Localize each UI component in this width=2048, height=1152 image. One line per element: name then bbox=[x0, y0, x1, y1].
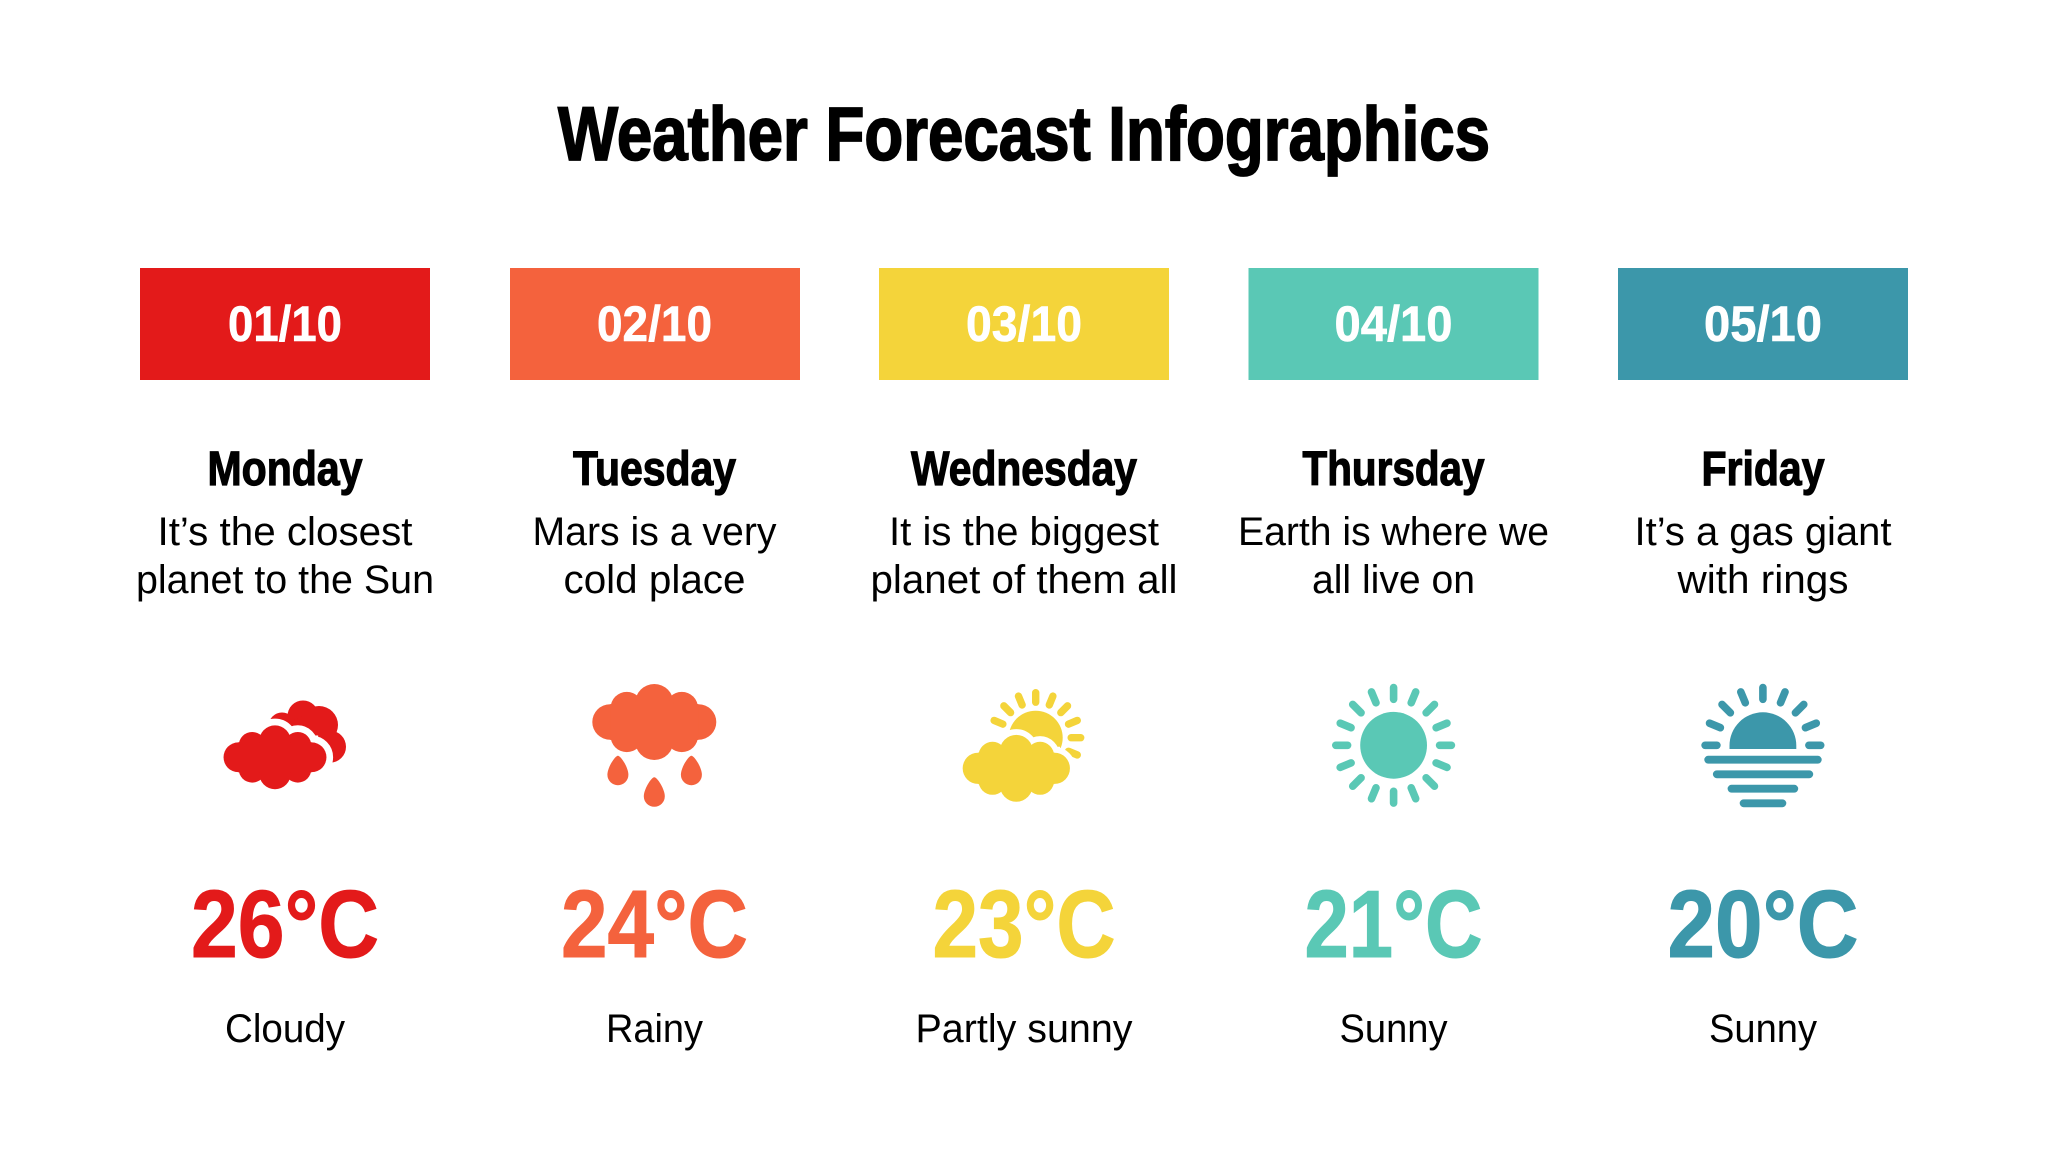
day heading: Wednesday: Wednesday bbox=[911, 443, 1137, 496]
temperature: 24°C: 24°C bbox=[561, 871, 748, 978]
icon: sun bbox=[1336, 688, 1451, 803]
condition label: Sunny: Sunny bbox=[1340, 1007, 1448, 1051]
description: Tuesday bbox=[532, 510, 776, 602]
description: Friday: with rings bbox=[1676, 558, 1848, 602]
day heading: Friday: Friday bbox=[1702, 443, 1825, 496]
date badge: 01/10: 01/10 bbox=[228, 296, 342, 352]
description: Friday bbox=[1634, 510, 1892, 602]
description: Wednesday bbox=[870, 510, 1178, 602]
condition label: Sunny: Sunny bbox=[1709, 1007, 1817, 1051]
icon: rainy bbox=[592, 684, 716, 807]
date badge: 03/10 bbox=[879, 268, 1169, 380]
temperature: 26°C: 26°C bbox=[191, 871, 379, 978]
condition label: Cloudy: Cloudy bbox=[225, 1007, 345, 1051]
description: Wednesday: planet of them all bbox=[870, 558, 1178, 602]
column: Wednesday bbox=[870, 268, 1178, 1051]
icon: sunset over water bbox=[1705, 688, 1821, 803]
description: Tuesday: Mars is a very bbox=[532, 510, 776, 554]
description: Tuesday: cold place bbox=[564, 558, 746, 602]
date badge: 02/10: 02/10 bbox=[597, 296, 712, 352]
column: Thursday bbox=[1238, 268, 1549, 1051]
description: Thursday bbox=[1238, 510, 1549, 602]
temperature: 20°C: 20°C bbox=[1668, 871, 1858, 978]
description: Thursday: Earth is where we bbox=[1238, 510, 1549, 554]
date badge: 05/10 bbox=[1618, 268, 1908, 380]
description: Monday bbox=[136, 510, 434, 602]
date badge: 04/10 bbox=[1248, 268, 1538, 380]
date badge: 03/10: 03/10 bbox=[966, 296, 1082, 352]
description: Monday: planet to the Sun bbox=[136, 558, 434, 602]
day heading: Monday: Monday bbox=[208, 443, 363, 496]
date badge: 02/10 bbox=[510, 268, 800, 380]
date badge: 04/10: 04/10 bbox=[1334, 296, 1452, 352]
condition label: Partly sunny: Partly sunny bbox=[916, 1007, 1132, 1051]
day heading: Thursday: Thursday bbox=[1302, 443, 1485, 496]
column: Monday bbox=[136, 268, 434, 1051]
icon: partly sunny bbox=[963, 693, 1081, 802]
description: Wednesday: It is the biggest bbox=[889, 510, 1159, 554]
description: Thursday: all live on bbox=[1312, 558, 1475, 602]
column: Friday bbox=[1618, 268, 1908, 1051]
temperature: 23°C: 23°C bbox=[932, 871, 1116, 978]
column: Tuesday bbox=[510, 268, 800, 1051]
date badge: 01/10 bbox=[140, 268, 430, 380]
condition label: Rainy: Rainy bbox=[606, 1007, 703, 1051]
date badge: 05/10: 05/10 bbox=[1704, 296, 1822, 352]
day heading: Tuesday: Tuesday bbox=[573, 443, 736, 496]
description: Monday: It’s the closest bbox=[158, 510, 412, 554]
description: Friday: It’s a gas giant bbox=[1634, 510, 1892, 554]
title: Weather Forecast Infographics bbox=[558, 92, 1490, 177]
icon: cloudy bbox=[224, 700, 346, 789]
temperature: 21°C: 21°C bbox=[1304, 871, 1482, 978]
